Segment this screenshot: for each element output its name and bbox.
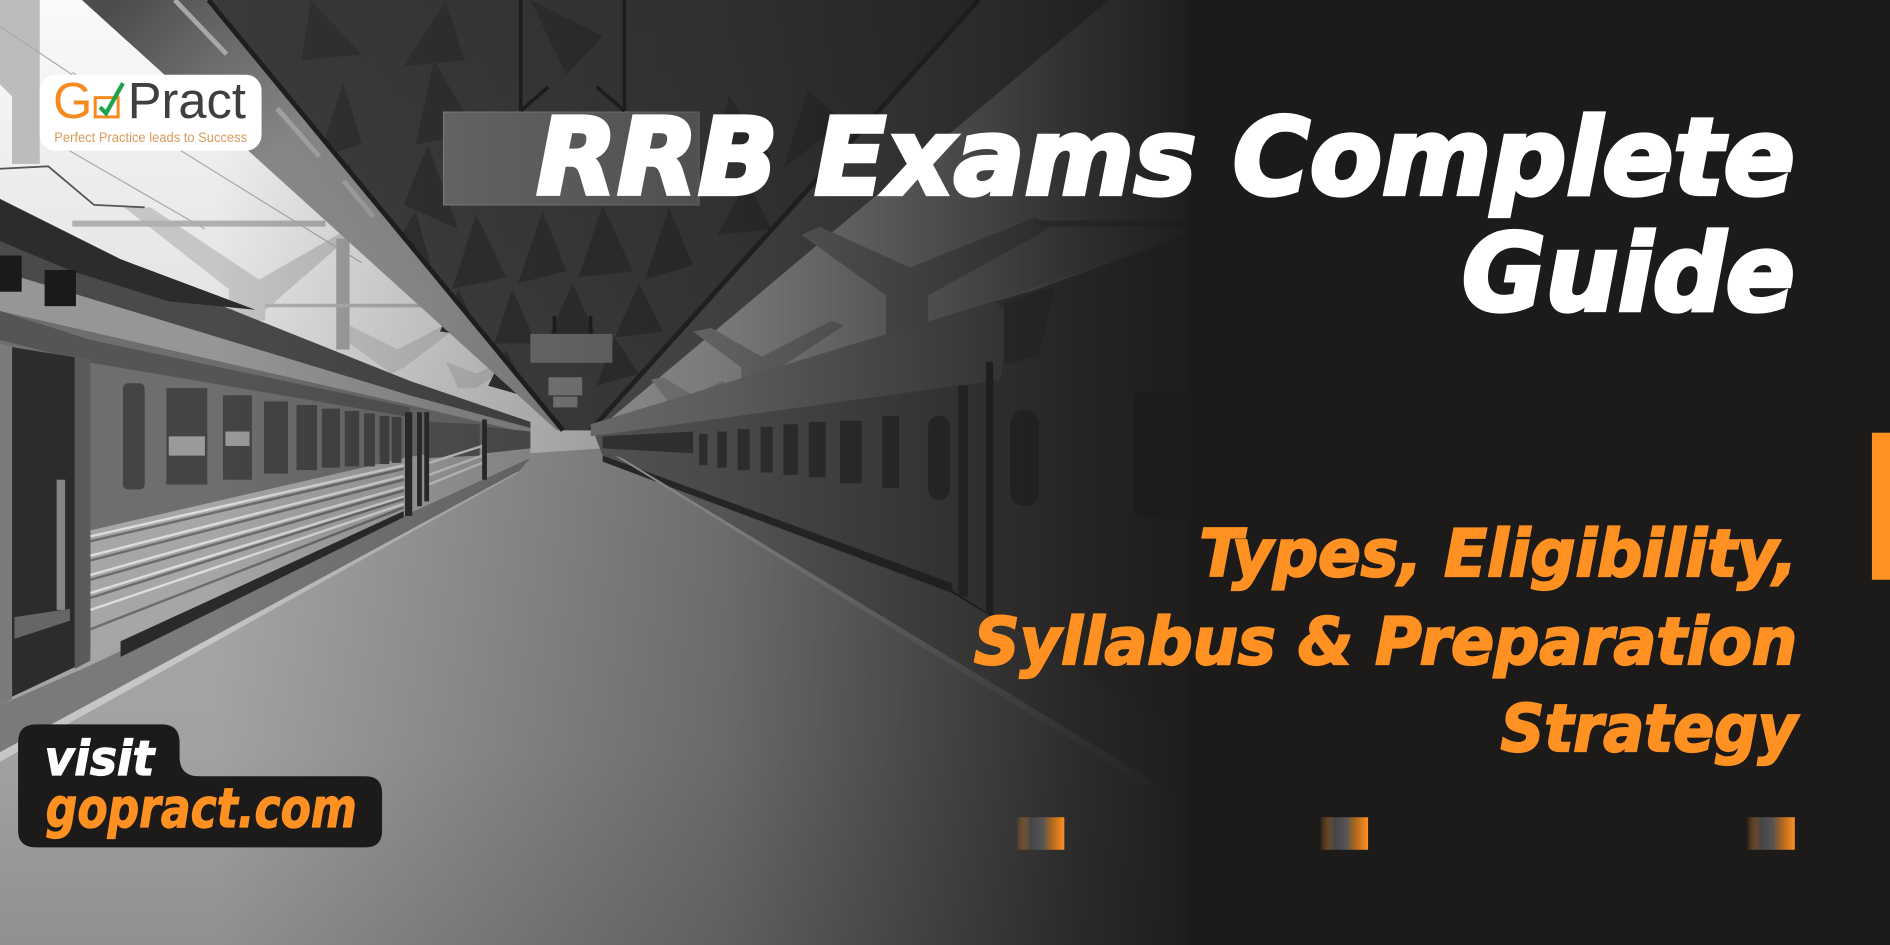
steel truss structures <box>0 0 512 388</box>
left train carriage joints <box>121 412 487 657</box>
title line 1: RRB Exams Complete <box>536 97 1795 220</box>
dark right panel <box>1187 0 1890 945</box>
railway station photo <box>0 0 1193 945</box>
pantograph <box>0 166 145 207</box>
left train ribbed lower panel <box>90 436 530 661</box>
orange side bar <box>1872 433 1890 580</box>
gradient tick marks <box>1016 817 1795 850</box>
right trusses <box>651 217 1187 410</box>
badge shape <box>18 724 382 847</box>
overhead wires <box>0 27 362 263</box>
right train roof <box>591 301 1010 436</box>
title <box>536 97 1795 336</box>
right canopy beam <box>591 0 1109 430</box>
hanging sign large <box>444 112 699 205</box>
left train roof <box>0 199 530 429</box>
left train windows <box>123 383 530 489</box>
subtitle line 2: Syllabus & Preparation <box>974 605 1797 680</box>
left train ribs <box>90 446 482 629</box>
badge text visit: visit <box>45 731 156 787</box>
left platform edge band <box>0 458 530 755</box>
right train details <box>603 287 1187 615</box>
left train roof equipment <box>0 199 256 310</box>
logo word Pract: Pract <box>128 72 246 129</box>
right platform edge line <box>615 456 1157 786</box>
sky <box>0 0 1193 482</box>
small notice boards <box>548 377 582 407</box>
sign hangers <box>521 0 624 334</box>
badge text url: gopract.com <box>46 777 357 840</box>
visit badge <box>18 724 382 847</box>
logo tagline: Perfect Practice leads to Success <box>54 129 247 145</box>
left train window highlights <box>169 432 250 456</box>
left canopy beam <box>82 0 563 430</box>
ceiling <box>209 0 979 430</box>
logo background <box>40 75 262 151</box>
left train upper body <box>0 241 530 567</box>
ceiling pyramid pattern <box>301 0 844 398</box>
left platform edge line <box>0 470 523 762</box>
subtitle line 3: Strategy <box>1501 692 1800 767</box>
left train door <box>12 347 78 697</box>
small hanging sign <box>530 334 612 363</box>
right train body <box>591 235 1187 735</box>
dark gradient overlay <box>0 0 1193 945</box>
title line 2: Guide <box>1462 213 1795 336</box>
logo badge <box>40 72 262 151</box>
right platform edge band <box>603 456 1187 805</box>
logo tick box <box>95 83 123 117</box>
platform floor <box>0 448 1187 945</box>
subtitle line 1: Types, Eligibility, <box>1199 517 1797 592</box>
beam lights <box>175 0 374 217</box>
left beam dark edge <box>209 0 563 430</box>
subtitle <box>974 517 1800 767</box>
right sky <box>597 0 1193 430</box>
logo letter G: G <box>53 72 92 129</box>
